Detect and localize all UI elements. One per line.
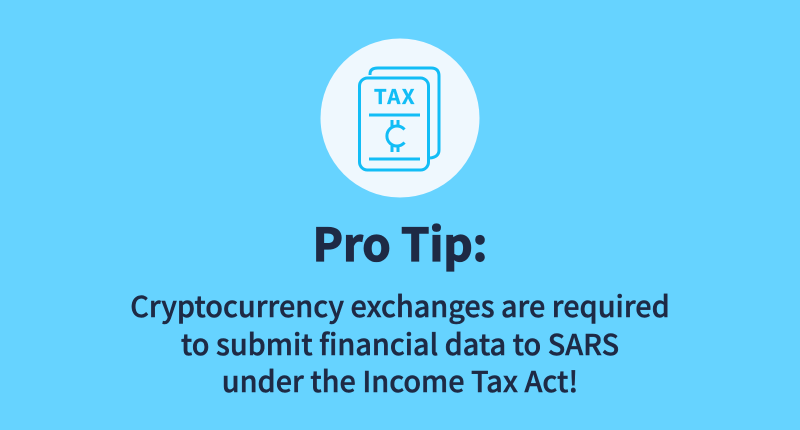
front document — [360, 78, 428, 170]
upper rule — [369, 114, 420, 116]
body text: to submit financial data to SARS — [181, 322, 619, 364]
icon: tax document with crypto symbol in circle — [320, 38, 480, 198]
document label: TAX — [374, 80, 416, 110]
title: Pro Tip: — [313, 209, 487, 275]
body text: under the Income Tax Act! — [222, 360, 578, 401]
body text: Cryptocurrency exchanges are required — [130, 285, 670, 326]
lower rule — [369, 158, 420, 160]
crypto symbol — [387, 120, 404, 152]
rear document — [370, 68, 439, 158]
icon background circle — [320, 38, 480, 198]
body text — [130, 285, 670, 401]
